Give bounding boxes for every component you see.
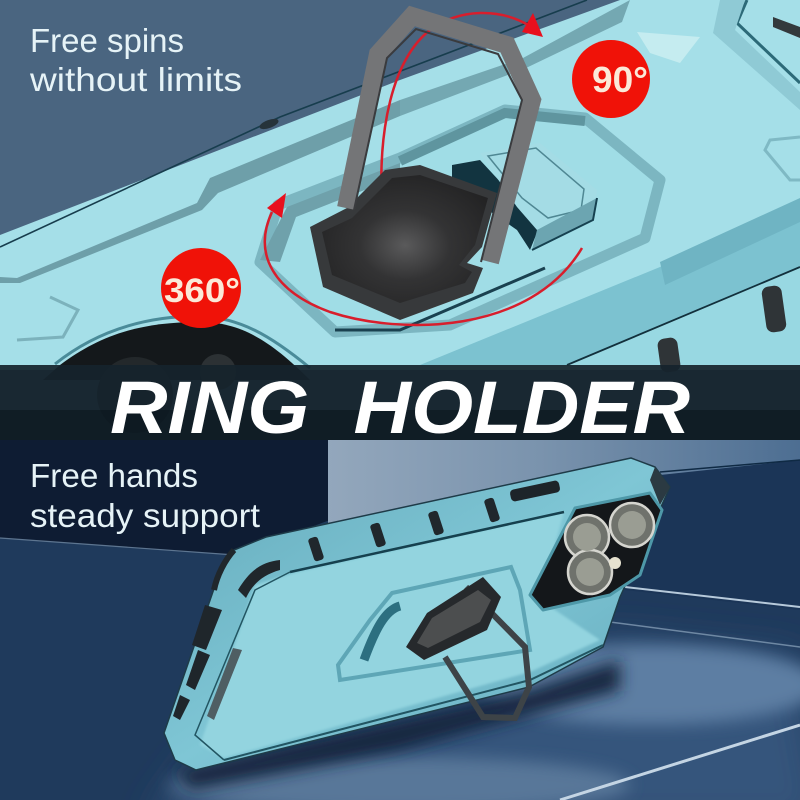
- camera island: [530, 493, 662, 610]
- text: free hands: [30, 457, 260, 534]
- title: RING HOLDER: [110, 366, 690, 449]
- panel: phone case close-up: [0, 0, 800, 433]
- top right window: [737, 0, 800, 83]
- text: free hands: Free hands: [30, 457, 198, 494]
- callout: 360 degrees: [161, 248, 241, 328]
- text: free spins: Free spins: [30, 22, 184, 59]
- camera cutout: [43, 322, 310, 380]
- lower background panel: [0, 440, 800, 800]
- recess around the ring base: [260, 110, 660, 332]
- text: free spins: [29, 22, 242, 98]
- side buttons: [761, 285, 787, 333]
- icon: red rotation arc 90 degrees (behind ring): [381, 13, 543, 205]
- top background: [0, 0, 800, 370]
- panel: phone on stand: [164, 458, 670, 770]
- banner band: [0, 365, 800, 449]
- callout: 360 degrees: 360°: [164, 272, 240, 310]
- icon: red rotation arc 360 degrees: [265, 193, 582, 325]
- icon: ring stand: [406, 577, 529, 718]
- callout: 90 degrees: [572, 40, 650, 118]
- clip slider block: [452, 143, 597, 250]
- text: free hands: steady support: [30, 497, 260, 534]
- icon: ring holder: [310, 16, 532, 320]
- edge vents: [308, 536, 324, 562]
- hex emboss marks: [637, 32, 700, 63]
- ring recess: [338, 567, 530, 680]
- corner bumper left: [238, 560, 280, 598]
- text: free spins: without limits: [29, 61, 242, 98]
- callout: 90 degrees: 90°: [592, 59, 648, 100]
